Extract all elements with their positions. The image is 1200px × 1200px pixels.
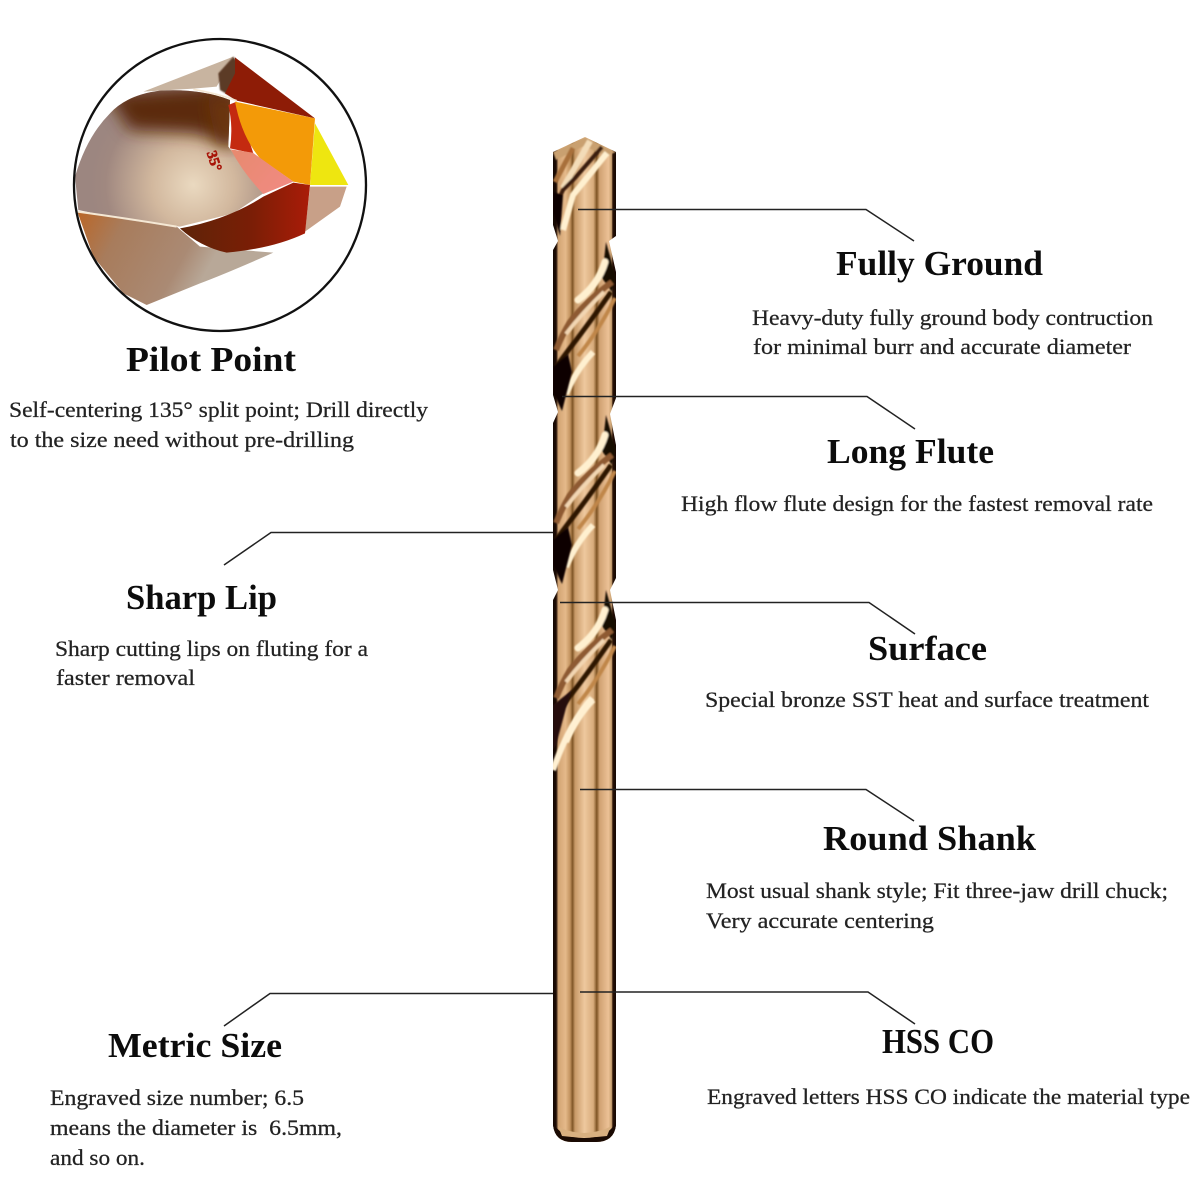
red facet — [228, 102, 253, 153]
block: Sharp Lip — [55, 578, 368, 690]
135 degree mark: 35° — [203, 149, 224, 174]
description — [55, 636, 368, 690]
callout line: Metric Size — [224, 994, 553, 1026]
description: Engraved size number; 6.5 — [50, 1085, 304, 1110]
main flank — [75, 90, 263, 227]
description — [706, 878, 1168, 933]
callout line: Surface — [560, 602, 915, 634]
heading: Metric Size — [108, 1026, 282, 1065]
heading: Round Shank — [823, 819, 1037, 858]
description: Very accurate centering — [706, 908, 934, 933]
description: Heavy-duty fully ground body contruction — [752, 305, 1153, 330]
drill tip fluting — [553, 137, 616, 236]
bright edges — [77, 212, 177, 227]
description — [752, 305, 1153, 359]
dark patch — [218, 56, 236, 99]
block: Surface — [705, 629, 1149, 712]
heading: HSS CO — [882, 1022, 994, 1061]
tan facet — [305, 187, 347, 232]
description — [9, 397, 428, 452]
heading: Fully Ground — [836, 244, 1044, 283]
circle outline — [74, 39, 366, 331]
flute section 2 — [556, 242, 616, 394]
block: Round Shank — [706, 819, 1168, 933]
dark red band — [180, 183, 310, 253]
heading: Pilot Point — [126, 340, 296, 379]
flute section 3 — [556, 415, 616, 567]
description: Self-centering 135° split point; Drill directly — [9, 397, 428, 422]
block: Metric Size — [50, 1026, 342, 1170]
description: to the size need without pre-drilling — [10, 427, 354, 452]
icon: pilot point close-up — [74, 39, 366, 331]
dark shading on flank — [107, 83, 237, 145]
callout line: HSS CO — [580, 992, 915, 1024]
description: faster removal — [56, 665, 195, 690]
description: Special bronze SST heat and surface treatment — [705, 687, 1149, 712]
flute section 4 — [556, 590, 616, 742]
lower flute run-out — [553, 690, 572, 750]
callout line: Long Flute — [562, 396, 915, 429]
lower body — [77, 212, 273, 305]
callout line: Fully Ground — [578, 210, 914, 241]
block: Pilot Point — [9, 340, 428, 452]
heading: Long Flute — [827, 432, 994, 471]
dark red facet — [225, 57, 315, 118]
description: Most usual shank style; Fit three-jaw drill chuck; — [706, 878, 1168, 903]
callout line: Sharp Lip — [224, 532, 553, 565]
heading: Surface — [868, 629, 987, 668]
block: Fully Ground — [752, 244, 1153, 359]
block: Long Flute — [681, 432, 1153, 516]
yellow facet — [310, 123, 348, 185]
heading: Sharp Lip — [126, 578, 277, 617]
orange facet — [235, 102, 315, 185]
description: means the diameter is 6.5mm, — [50, 1115, 342, 1140]
block: HSS CO — [707, 1022, 1190, 1109]
description: Sharp cutting lips on fluting for a — [55, 636, 368, 661]
description — [50, 1085, 342, 1170]
shank end bevel — [553, 1125, 616, 1142]
description: and so on. — [50, 1145, 145, 1170]
description: for minimal burr and accurate diameter — [753, 334, 1132, 359]
drill bit — [553, 137, 616, 1142]
description: Engraved letters HSS CO indicate the material type — [707, 1084, 1190, 1109]
pink facet — [231, 149, 293, 194]
top sliver — [143, 57, 233, 92]
callout line: Round Shank — [580, 790, 914, 821]
description: High flow flute design for the fastest removal rate — [681, 491, 1153, 516]
